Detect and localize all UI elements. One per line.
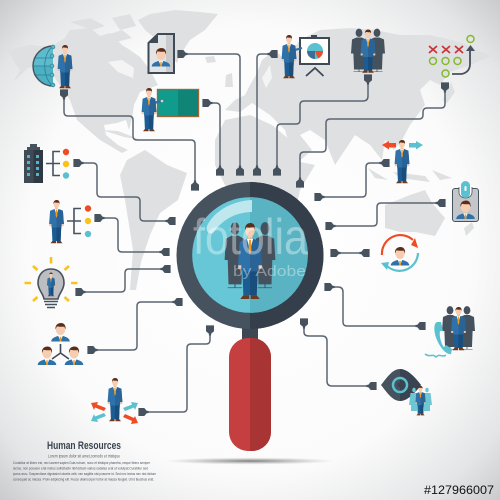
icon: strategy play (429, 36, 475, 77)
body text: purus arcu. Suspendisse dignissim lobortis velit, nec sagittis nisl posuere id. Sed nec lectus nec nisl dictum (13, 471, 157, 476)
world map (8, 10, 492, 290)
icon: phone with crowd (425, 306, 475, 357)
heading: Human Resources (47, 440, 121, 452)
shadow people in lens (225, 222, 275, 288)
main person in lens (238, 223, 262, 299)
stock image id: #127966007 (424, 485, 494, 497)
magnifier shadow (165, 458, 335, 464)
lens (192, 197, 308, 313)
watermark: by Adobe (233, 263, 306, 280)
icon: teacher at board (142, 88, 198, 131)
icon: person tree (49, 200, 91, 243)
icon: person with left and right arrows (382, 140, 423, 183)
icon: CV document (148, 34, 174, 73)
connector wires (64, 54, 445, 412)
dark rim (176, 182, 324, 329)
icon: globe with person (33, 45, 72, 88)
icon: company building tree (24, 144, 69, 183)
body text: Curabitur at libero est, nec laoreet sapien Duis rutrum, nunc et tristique pharetra, neque libero semper (13, 460, 151, 465)
icon: eye with people (381, 369, 432, 415)
body text: consequat ac massa. Proin adipiscing elit. Fusce ullamcorper tortor at massa feugiat. Ut id faucibus erat. (13, 476, 154, 482)
handle neck (242, 325, 258, 342)
icon: leader with crowd (351, 29, 385, 73)
body text (13, 460, 157, 482)
body text: lectus, non posuere erat metus sollicitudin nibh.Etiam varius sodales erat ut volutpat.Curabitur sed (13, 466, 148, 470)
icon: ID badge (452, 181, 478, 222)
icon: idea bulb (24, 257, 78, 308)
magnifying glass (176, 182, 324, 451)
icon: team of three (38, 323, 83, 365)
subtitle: Lorem ipsum dolor sit amet,comodo et tristique (48, 454, 121, 458)
icon: person with four arrows (91, 378, 138, 424)
red handle (229, 338, 271, 451)
title block (13, 440, 157, 482)
icon: presentation board (282, 35, 329, 78)
map inland seas (108, 60, 272, 88)
connector plugs (60, 50, 449, 416)
icon: recycle circle person (381, 235, 418, 271)
watermark: fotolia (193, 209, 308, 265)
